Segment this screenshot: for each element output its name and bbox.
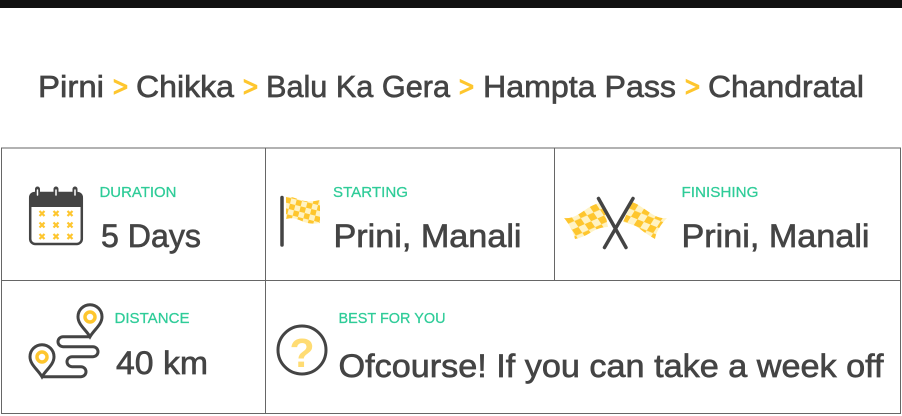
panel: duration [29,184,201,254]
label: finishing: FINISHING [682,184,758,201]
info table grid [2,148,900,414]
panel: distance [30,305,208,381]
title: route: Chikka [136,69,235,104]
title: route: Chandratal [708,69,864,104]
title: route: > [459,71,474,102]
panel: finishing [564,184,870,254]
icon: crossed checkered flags [564,198,667,248]
title: route: Hampta Pass [483,69,676,104]
title: route: Pirni [38,69,104,104]
value: 5 days: 5 Days [101,218,201,254]
icon: route with map pins [30,305,102,377]
title: route: > [685,71,700,102]
label: best for you: BEST FOR YOU [338,310,446,327]
top black bar [0,0,902,8]
title: route: > [243,71,258,102]
value: finishing place: Prini, Manali [682,218,870,254]
panel: best for you [278,310,884,384]
icon: calendar [29,189,83,244]
title: route: > [113,71,128,102]
title: route [38,69,864,104]
value: distance: 40 km [116,345,208,381]
title: route: Balu Ka Gera [266,69,451,104]
panel: starting [282,184,522,254]
label: starting: STARTING [333,184,408,201]
icon: checkered flag [282,197,320,245]
icon: question mark circle [278,326,326,376]
value: best for you: Ofcourse! If you can take a week off [338,348,884,384]
label: distance: DISTANCE [114,310,190,327]
label: duration: DURATION [100,184,176,201]
value: starting place: Prini, Manali [334,218,522,254]
icon: question mark circle: ? [289,330,315,376]
